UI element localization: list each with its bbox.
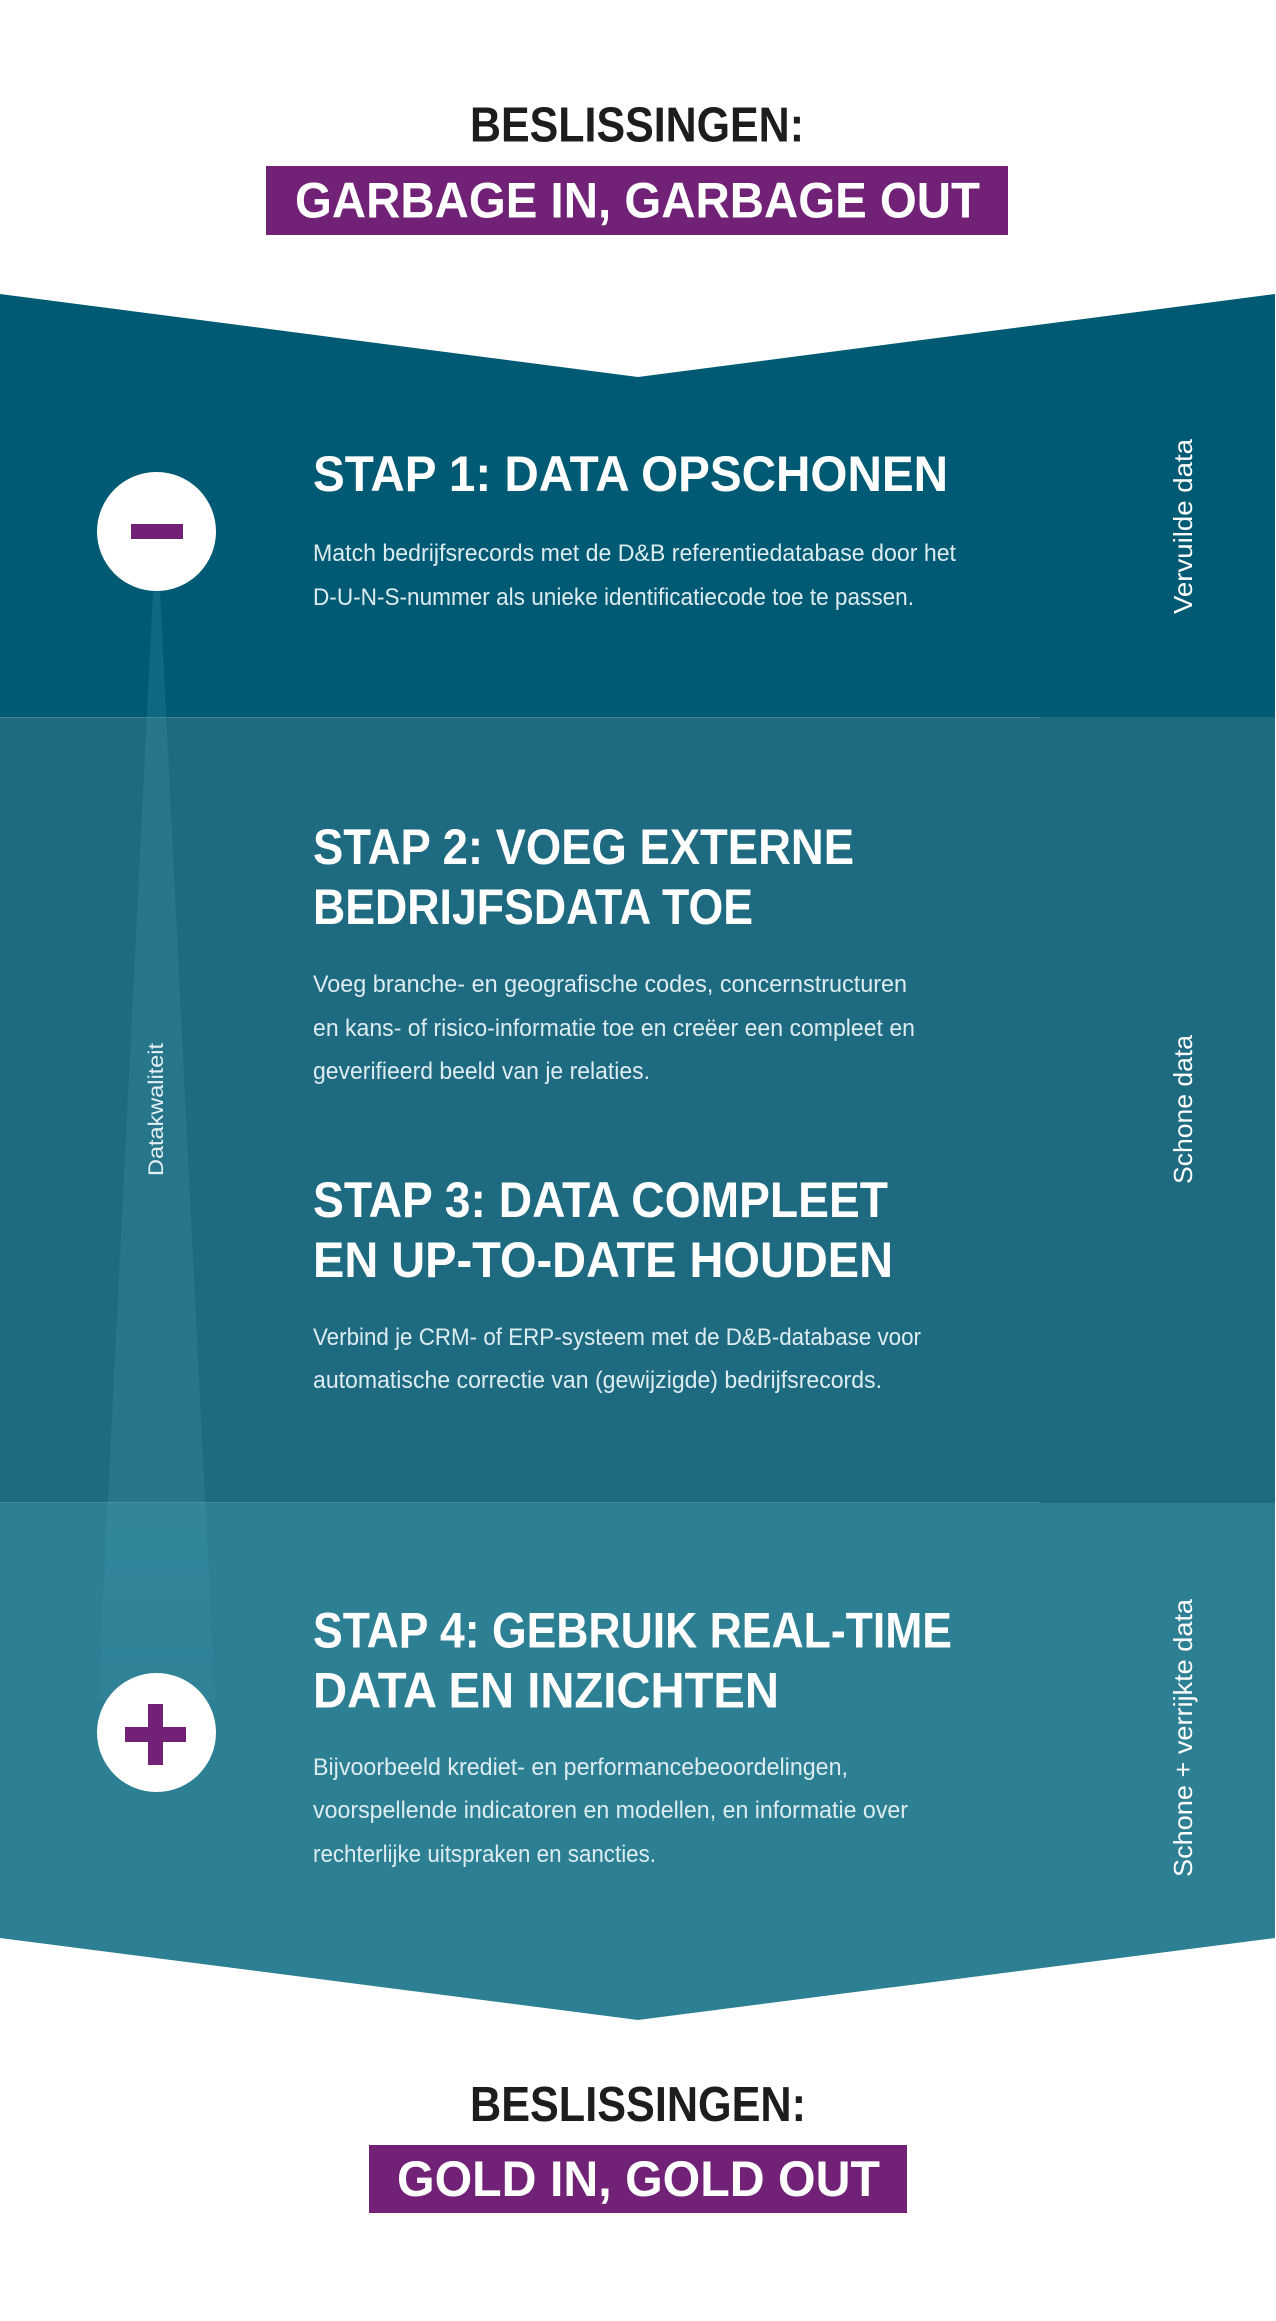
heading: step 2: BEDRIJFSDATA TOE — [313, 879, 753, 935]
text: step 2 description: Voeg branche- en geografische codes, concernstructuren — [313, 971, 907, 998]
icon: minus circle — [97, 472, 216, 591]
heading: step 2: STAP 2: VOEG EXTERNE — [313, 819, 854, 875]
text: step 4 description: voorspellende indicatoren en modellen, en informatie over — [313, 1797, 908, 1824]
text: step 2 description — [313, 971, 915, 1085]
text: step 1 description — [313, 540, 956, 611]
label: datakwaliteit: Datakwaliteit — [145, 1043, 168, 1176]
heading: step 4: DATA EN INZICHTEN — [313, 1662, 779, 1718]
panel: step 1 — [0, 294, 1275, 717]
text: step 3 description — [313, 1324, 921, 1394]
heading: step 3: STAP 3: DATA COMPLEET — [313, 1172, 888, 1228]
text: step 2 description: geverifieerd beeld van je relaties. — [313, 1058, 650, 1085]
text: step 4 description: Bijvoorbeeld krediet- en performancebeoordelingen, — [313, 1754, 848, 1781]
text: step 4 description — [313, 1754, 908, 1868]
heading: beslissingen top: BESLISSINGEN: — [470, 98, 804, 152]
label: vervuilde data: Vervuilde data — [1168, 438, 1198, 614]
text: step 3 description: Verbind je CRM- of ERP-systeem met de D&B-database voor — [313, 1324, 921, 1351]
panel: steps 2 and 3 — [0, 717, 1275, 1503]
banner: gold in, gold out: GOLD IN, GOLD OUT — [397, 2151, 880, 2207]
heading: step 2 — [313, 819, 854, 935]
text: step 1 description: Match bedrijfsrecords met de D&B referentiedatabase door het — [313, 540, 956, 567]
heading: step 3: EN UP-TO-DATE HOUDEN — [313, 1232, 893, 1288]
heading: step 4: STAP 4: GEBRUIK REAL-TIME — [313, 1602, 952, 1658]
heading: step 3 — [313, 1172, 893, 1288]
arrow: data quality beam — [98, 591, 215, 1700]
icon: plus circle — [97, 1673, 216, 1792]
text: step 2 description: en kans- of risico-informatie toe en creëer een compleet en — [313, 1015, 915, 1042]
heading: step 1: STAP 1: DATA OPSCHONEN — [313, 446, 948, 502]
banner: garbage in, garbage out: GARBAGE IN, GARBAGE OUT — [295, 172, 980, 228]
label: schone data: Schone data — [1168, 1034, 1198, 1184]
text: step 4 description: rechterlijke uitspraken en sancties. — [313, 1841, 656, 1868]
label: schone + verrijkte data: Schone + verrijkte data — [1168, 1598, 1198, 1877]
panel: step 4 — [0, 1502, 1275, 2020]
heading: beslissingen bottom: BESLISSINGEN: — [470, 2078, 806, 2132]
panel: bottom heading — [369, 2078, 907, 2213]
text: step 3 description: automatische correctie van (gewijzigde) bedrijfsrecords. — [313, 1367, 882, 1394]
panel: top heading — [266, 98, 1008, 235]
heading: step 4 — [313, 1602, 952, 1718]
text: step 1 description: D-U-N-S-nummer als unieke identificatiecode toe te passen. — [313, 584, 914, 611]
